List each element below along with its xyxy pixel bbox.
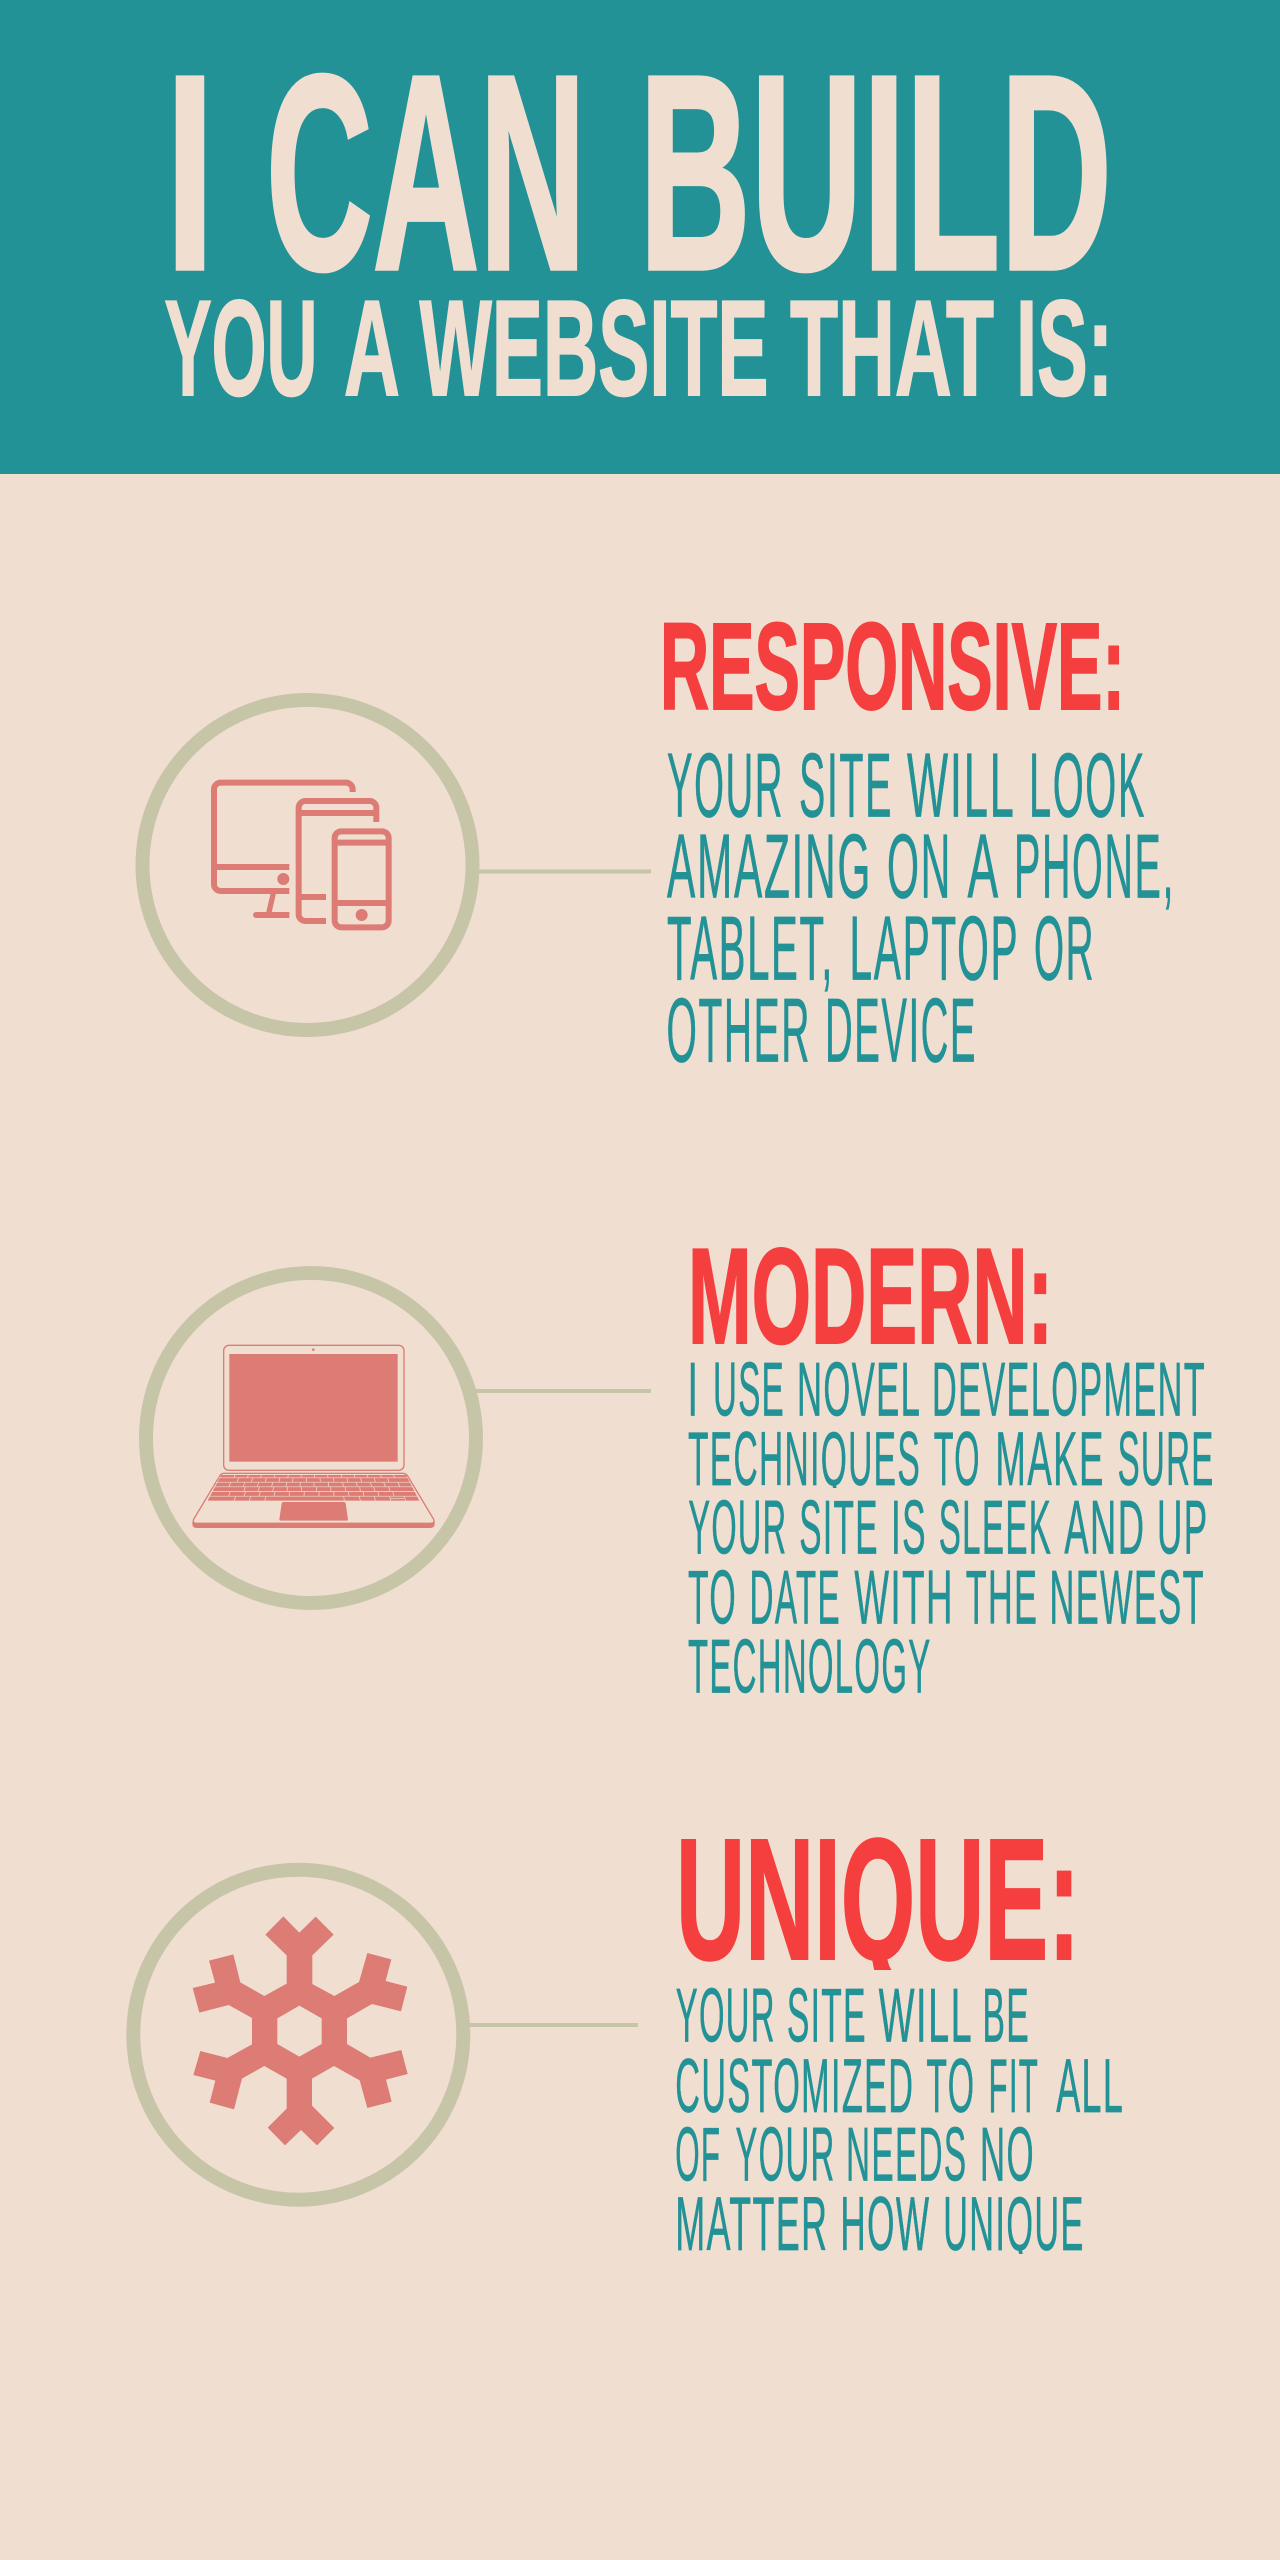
connector line: modern	[476, 1389, 651, 1393]
icon: snowflake	[193, 1916, 408, 2145]
body text: unique: YOUR	[676, 1974, 776, 2059]
circle: modern	[146, 1273, 476, 1603]
body text: modern	[688, 1348, 1215, 1709]
body text: unique: MATTER	[675, 2182, 828, 2267]
title line 2: YOU	[164, 272, 318, 424]
circle: unique	[133, 1870, 463, 2200]
body text: responsive	[666, 736, 1175, 1082]
body text: modern: DATE	[750, 1555, 841, 1640]
body text: responsive: YOUR	[667, 736, 784, 837]
title line 2: A	[344, 272, 398, 424]
body text: responsive: LAPTOP	[850, 899, 1018, 1000]
body text: modern: TECHNOLOGY	[688, 1624, 932, 1709]
icon: responsive devices	[214, 783, 389, 927]
title line 1: CAN	[266, 17, 586, 328]
body text: unique: FIT	[988, 2044, 1038, 2129]
panel: responsive	[142, 599, 1175, 1082]
body text: responsive: DEVICE	[825, 981, 977, 1082]
body text: modern: TECHNIQUES	[688, 1417, 921, 1502]
body text: unique: WILL	[879, 1974, 972, 2059]
connector line: unique	[468, 2023, 638, 2027]
body text: modern: IS	[891, 1486, 927, 1571]
panel: modern	[146, 1220, 1215, 1709]
title line 1: I	[165, 17, 215, 328]
body text: unique: BE	[982, 1974, 1030, 2059]
body text: modern: TO	[934, 1417, 981, 1502]
body text: modern: THE	[966, 1555, 1038, 1640]
body text: unique: TO	[926, 2044, 975, 2129]
title line 2: IS:	[1016, 272, 1113, 424]
body text: modern: UP	[1157, 1486, 1208, 1571]
body text: responsive: TABLET,	[667, 899, 834, 1000]
body text: modern: SLEEK	[939, 1486, 1052, 1571]
connector line: responsive	[478, 870, 651, 874]
body text: responsive: WILL	[907, 736, 1014, 837]
body text: modern: USE	[713, 1348, 785, 1433]
header band	[0, 0, 1280, 474]
body text: unique: CUSTOMIZED	[675, 2044, 914, 2129]
body text: modern: AND	[1064, 1486, 1145, 1571]
body text: responsive: OTHER	[666, 981, 811, 1082]
body text: modern: I	[688, 1348, 700, 1433]
body text: unique: HOW	[840, 2182, 930, 2267]
body text: responsive: OR	[1034, 899, 1095, 1000]
panel: unique	[133, 1802, 1124, 2267]
body text: unique: NEEDS	[846, 2113, 968, 2198]
body text: responsive: A	[968, 817, 998, 918]
body text: modern: SITE	[799, 1486, 879, 1571]
body text: responsive: AMAZING	[667, 817, 872, 918]
body text: modern: WITH	[854, 1555, 954, 1640]
icon: laptop	[192, 1345, 435, 1528]
body text: unique	[675, 1974, 1124, 2267]
body text: responsive: SITE	[799, 736, 893, 837]
title line 2: WEBSITE	[420, 272, 768, 424]
body text: responsive: ON	[887, 817, 952, 918]
body text: unique: UNIQUE	[943, 2182, 1085, 2267]
body text: modern: NOVEL	[797, 1348, 920, 1433]
infographic canvas: ALL	[1056, 2044, 1124, 2129]
body text: unique: SITE	[787, 1974, 867, 2059]
body text: unique: NO	[980, 2113, 1035, 2198]
circle: responsive	[142, 700, 472, 1030]
body text: modern: TO	[688, 1555, 737, 1640]
body text: unique: OF	[675, 2113, 721, 2198]
title line 2: THAT	[790, 272, 994, 424]
body text: unique: YOUR	[736, 2113, 836, 2198]
body text: modern: MAKE	[995, 1417, 1105, 1502]
body text: modern: YOUR	[688, 1486, 787, 1571]
